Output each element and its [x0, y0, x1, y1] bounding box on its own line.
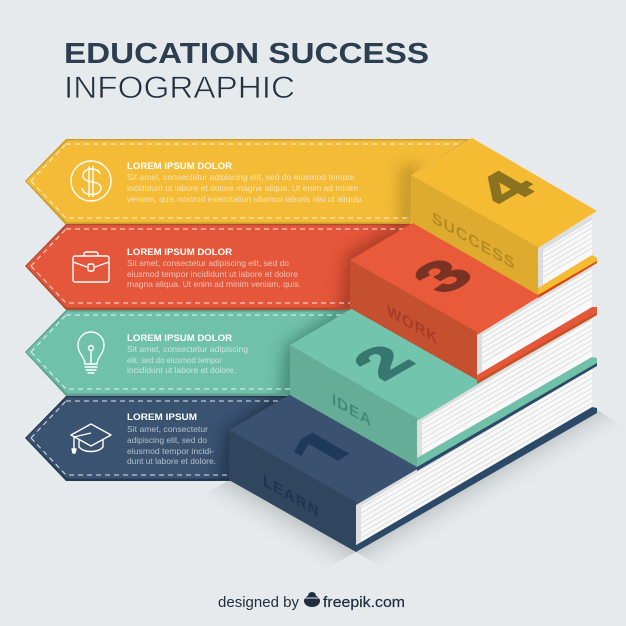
text block: ribbon 3: LOREM IPSUM DOLOR	[127, 247, 233, 257]
text block: ribbon 1: adipiscing elit, sed do	[127, 435, 207, 445]
icon: freepik logo	[303, 592, 321, 607]
text block: ribbon 4: incididunt ut labore et dolore magna aliqua. Ut enim ad minim	[127, 183, 358, 193]
title	[64, 38, 429, 105]
text block: ribbon 3: Sit amet, consectetur adipiscing elit, sed do	[127, 258, 289, 268]
floor shadow right of book	[356, 410, 626, 570]
floor shadow left of book	[195, 480, 356, 572]
icon: light bulb	[78, 332, 104, 373]
text block: ribbon 1	[127, 412, 216, 466]
text block: ribbon 4	[127, 161, 364, 204]
spine label SUCCESS: SUCCESS	[432, 209, 515, 274]
text block: ribbon 4: Sit amet, consectetur adipiscing elit, sed do eiusmod tempor	[127, 172, 355, 182]
panel: ribbon 1 navy	[25, 396, 287, 481]
spine label WORK: WORK	[387, 302, 438, 348]
text block: ribbon 4: veniam, quis nostrud exercitation ullamco laboris nisi ut aliquip.	[127, 194, 364, 204]
text block: ribbon 2: Sit amet, consectetur adipiscing	[127, 344, 248, 354]
footer credit	[218, 592, 405, 611]
text block: ribbon 4: LOREM IPSUM DOLOR	[127, 161, 233, 171]
text block: ribbon 2	[127, 333, 248, 375]
text block: ribbon 2: incididunt ut labore et dolore.	[127, 365, 236, 375]
text block: ribbon 2: LOREM IPSUM DOLOR	[127, 333, 233, 343]
number 4: 4	[460, 162, 550, 214]
text block: ribbon 3: eiusmod tempor incididunt ut labore et dolore	[127, 269, 298, 279]
number 3: 3	[398, 250, 488, 302]
icon: briefcase	[73, 252, 109, 282]
icon: dollar coin	[71, 161, 111, 201]
panel: ribbon 2 teal	[25, 310, 350, 396]
text block: ribbon 1: eiusmod tempor incidi-	[127, 446, 214, 456]
text block: ribbon 1: LOREM IPSUM	[127, 412, 197, 422]
spine label LEARN: LEARN	[263, 472, 319, 521]
spine label IDEA: IDEA	[332, 391, 372, 431]
panel: ribbon 3 red	[25, 224, 411, 310]
title: EDUCATION SUCCESS	[64, 38, 429, 70]
book 3 work	[350, 189, 597, 384]
icon: graduation cap	[71, 424, 111, 453]
footer credit: designed by	[218, 595, 300, 611]
text block: ribbon 3	[127, 247, 301, 289]
title: INFOGRAPHIC	[64, 69, 295, 105]
number 1: 1	[266, 415, 389, 486]
text block: ribbon 3: magna aliqua. Ut enim ad minim veniam, quis.	[127, 279, 301, 289]
number 2: 2	[338, 336, 428, 388]
text block: ribbon 2: elit, sed do eiusmod tempor	[127, 355, 222, 365]
book 4 success	[411, 138, 597, 298]
footer credit: freepik.com	[323, 595, 405, 611]
book 1 learn	[229, 358, 597, 552]
text block: ribbon 1: Sit amet, consectetur	[127, 424, 208, 434]
book 2 idea	[290, 239, 597, 471]
text block: ribbon 1: dunt ut labore et dolore.	[127, 456, 216, 466]
panel: ribbon 4 yellow	[25, 139, 470, 225]
